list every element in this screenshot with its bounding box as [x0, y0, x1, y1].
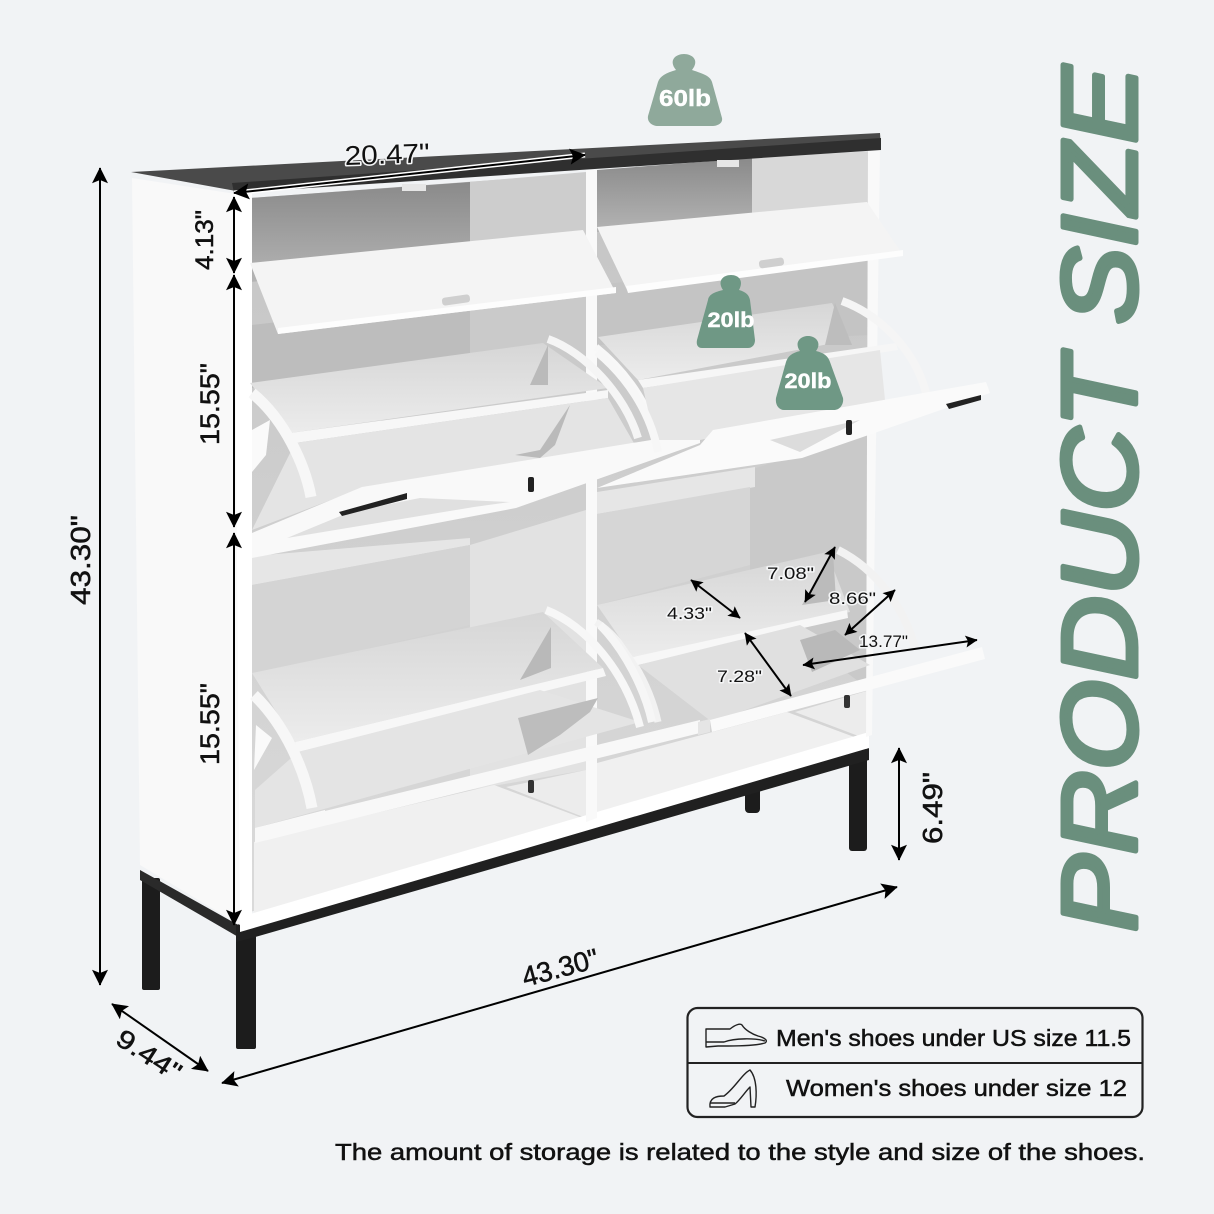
lower knob left — [528, 780, 534, 793]
title: product size: PRODUCT SIZE — [1041, 65, 1159, 932]
weight badge 60lb: 60lb — [659, 85, 711, 111]
weight badge 60lb — [648, 54, 722, 126]
footnote: The amount of storage is related to the style and size of the shoes. — [335, 1139, 1145, 1165]
label 6.49: 6.49" — [917, 772, 948, 844]
arrow: total height — [99, 168, 101, 985]
weight badge 20lb upper: 20lb — [708, 309, 754, 332]
label 20.47: 20.47" — [344, 138, 430, 171]
upper row back panels — [252, 300, 470, 388]
arrow: 8.66 — [845, 590, 895, 635]
legend: shoe sizes — [688, 1008, 1142, 1117]
lower door right — [710, 647, 985, 732]
label 7.08: 7.08" — [767, 564, 814, 583]
upper door left — [252, 432, 700, 558]
lower basket right — [597, 550, 915, 722]
cabinet front uprights — [234, 192, 252, 925]
top compartment shadow — [250, 182, 470, 282]
weight badge 20lb lower — [776, 336, 843, 410]
cabinet legs and rail — [140, 748, 869, 1049]
label 43.30 width: 43.30" — [519, 943, 602, 993]
arrow: bottom width — [222, 887, 897, 1083]
arrow: depth — [112, 1004, 208, 1071]
label 4.33: 4.33" — [667, 604, 712, 623]
label 7.28: 7.28" — [717, 667, 762, 686]
upper door right — [597, 382, 990, 488]
arrow: leg height — [898, 748, 900, 860]
icon: women's heel — [710, 1070, 756, 1107]
weight badge 20lb lower: 20lb — [784, 370, 832, 393]
label 8.66: 8.66" — [829, 589, 876, 608]
lower side wall panels — [470, 510, 586, 790]
arrow: top width — [234, 155, 585, 193]
hinge top right — [717, 160, 739, 167]
arrow: top section height — [233, 197, 235, 273]
weight badge 20lb upper — [697, 275, 755, 348]
cabinet interior back — [250, 152, 872, 912]
upper basket right — [597, 301, 926, 452]
knob — [528, 477, 534, 492]
arrow: upper drawer height — [233, 275, 235, 527]
arrow: 4.33 — [691, 580, 740, 618]
shoe cabinet — [131, 133, 990, 1049]
arrow: 7.28 — [745, 633, 791, 696]
bottom shelf floor and walls — [506, 770, 586, 818]
knob — [846, 420, 852, 435]
lower basket left — [252, 610, 658, 840]
arrow: lower drawer height — [233, 533, 235, 925]
hinge top left — [402, 184, 426, 191]
text: women's shoes: Women's shoes under size 12 — [786, 1075, 1127, 1101]
arrow: 7.08 — [805, 547, 835, 602]
cabinet left side panel — [132, 178, 240, 925]
top flap left — [250, 230, 616, 334]
arrow: 13.77 — [803, 640, 977, 665]
label 13.77: 13.77" — [859, 632, 908, 651]
label 9.44: 9.44" — [111, 1023, 187, 1087]
upper basket left — [250, 339, 655, 530]
dark cabinet top — [131, 133, 881, 191]
text: men's shoes: Men's shoes under US size 11.5 — [776, 1025, 1131, 1051]
label 4.13: 4.13" — [191, 210, 219, 270]
top flap right — [597, 202, 903, 293]
label 15.55 lower: 15.55" — [195, 683, 225, 765]
label 15.55 upper: 15.55" — [195, 363, 225, 445]
label 43.30 height: 43.30" — [65, 515, 96, 605]
icon: men's shoe — [706, 1024, 766, 1047]
lower door left — [255, 720, 700, 843]
lower knob right — [844, 695, 850, 708]
